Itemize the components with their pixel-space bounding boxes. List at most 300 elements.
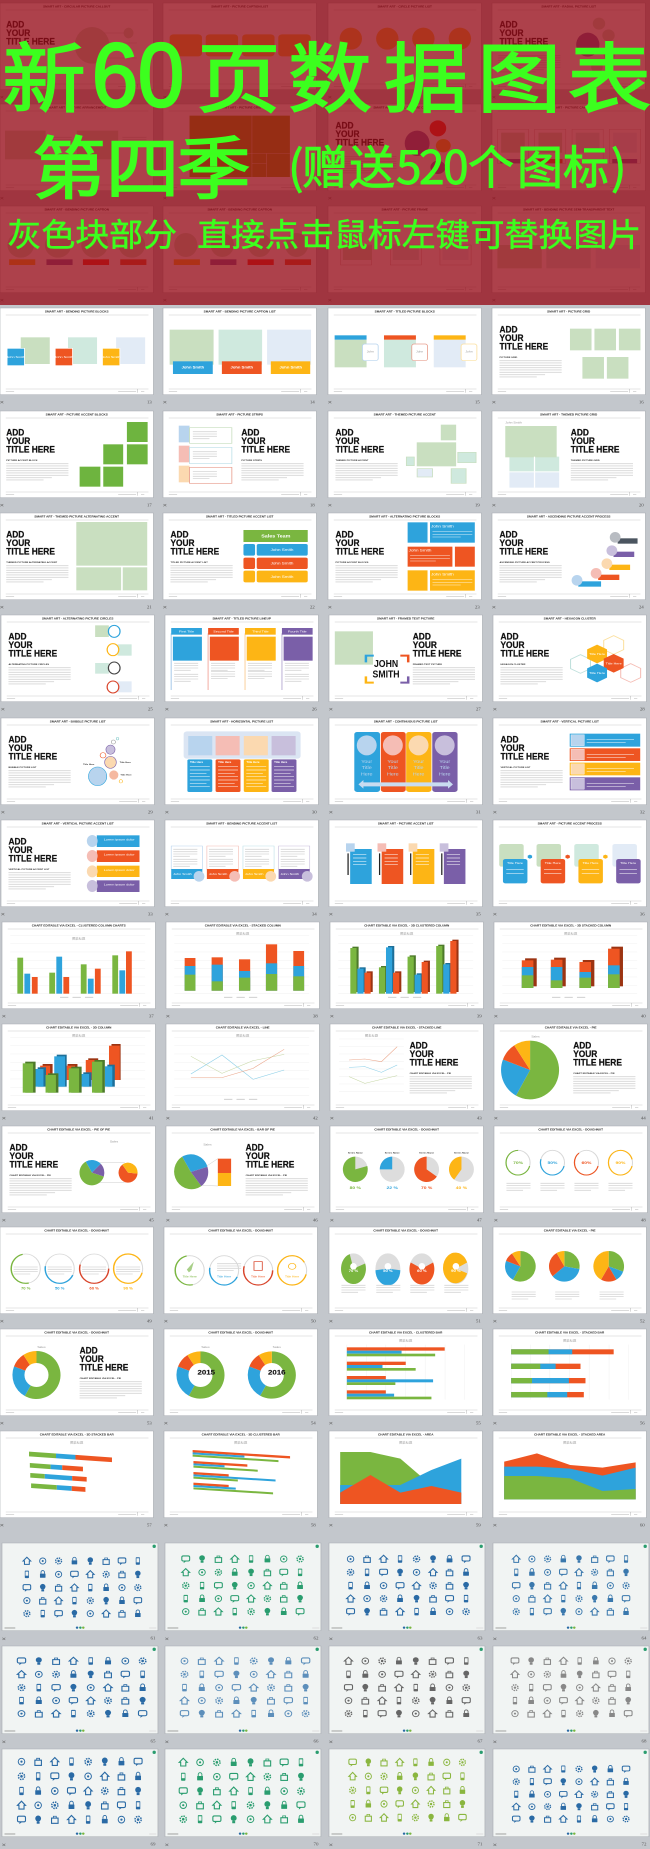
slide 29: Title Here bbox=[120, 761, 132, 764]
slide 17: SMART ART - PICTURE ACCENT BLOCKS bbox=[46, 413, 108, 417]
slide 53: doughnut chart: 53 bbox=[147, 1421, 153, 1425]
slide 32: VERTICAL PICTURE LIST bbox=[500, 766, 531, 769]
slide 50: doughnut icon rings: Title Here bbox=[251, 1275, 266, 1278]
slide 59: area chart: 59 bbox=[476, 1523, 482, 1527]
slide 68: icon grid: 68 bbox=[641, 1739, 647, 1744]
instruction line: 灰色块部分直接点击鼠标左键可替换图片 bbox=[7, 210, 641, 256]
slide 42: line chart: CHART EDITABLE VIA EXCEL - LINE bbox=[216, 1026, 270, 1030]
slide 1: circular picture callout: SMART ART - CIRCULAR PICTURE CALLOUT bbox=[43, 5, 111, 9]
slide 66: icon grid: 66 bbox=[313, 1739, 319, 1744]
slide 42: line chart: 图表标题 bbox=[236, 1033, 249, 1038]
slide 17: YOUR bbox=[6, 436, 31, 446]
slide 1: circular picture callout: YOUR bbox=[6, 28, 31, 38]
slide 23: John Smith bbox=[431, 572, 455, 576]
slide 26: Third Title bbox=[252, 630, 269, 634]
slide 47: doughnut percent pies: Series Name bbox=[385, 1152, 400, 1154]
slide 13 bbox=[0, 308, 153, 404]
slide 43: stacked line chart: CHART EDITABLE VIA EXCEL - PIE bbox=[410, 1072, 452, 1075]
slide 30 bbox=[165, 718, 318, 814]
slide 47: doughnut percent pies: 70 % bbox=[421, 1185, 432, 1190]
slide 23: John Smith bbox=[409, 548, 432, 553]
slide 28: Title Here bbox=[589, 652, 605, 656]
slide 55: clustered bar chart: CHART EDITABLE VIA EXCEL - CLUSTERED BAR bbox=[369, 1331, 442, 1335]
slide 51: doughnut pies with labels: 70 % bbox=[349, 1269, 359, 1273]
slide 17 bbox=[0, 411, 153, 507]
slide 43: stacked line chart: YOUR bbox=[410, 1049, 434, 1059]
slide 24: SMART ART - ASCENDING PICTURE ACCENT PROCESS bbox=[527, 515, 611, 519]
slide 34: John Smith bbox=[209, 872, 228, 876]
slide 37: clustered column chart bbox=[2, 922, 155, 1018]
slide 13: 13 bbox=[147, 400, 153, 404]
slide 54: two doughnuts 2015 2016 bbox=[164, 1329, 317, 1425]
slide 34 bbox=[165, 820, 318, 916]
slide 33: Lorem ipsum dolor bbox=[104, 838, 136, 842]
slide 48: doughnut rings: 70% bbox=[513, 1160, 523, 1165]
slide 43: stacked line chart: ADD bbox=[410, 1040, 428, 1050]
slide 58: 3D clustered bar chart: 图表标题 bbox=[234, 1440, 247, 1445]
slide 7: radial picture callout: SMART ART - RADIAL PICTURE CALLOUT bbox=[373, 106, 436, 110]
slide 23: TITLE HERE bbox=[335, 546, 384, 557]
slide 51: doughnut pies with labels: 90 % bbox=[451, 1269, 461, 1273]
slide 50: doughnut icon rings: 50 bbox=[311, 1319, 317, 1323]
slide 47: doughnut percent pies: 40 % bbox=[456, 1185, 467, 1190]
slide 49: doughnut text rings: CHART EDITABLE VIA EXCEL - DOUGHNUT bbox=[44, 1229, 109, 1233]
slide 38: stacked column chart bbox=[166, 922, 319, 1018]
slide 34: SMART ART - BENDING PICTURE ACCENT LIST bbox=[206, 822, 277, 826]
slide 28: TITLE HERE bbox=[500, 648, 549, 659]
slide 46: bar of pie: ADD bbox=[246, 1142, 264, 1152]
slide 50: doughnut icon rings: Title Here bbox=[217, 1275, 232, 1278]
slide 47: doughnut percent pies: Series Name bbox=[419, 1152, 435, 1154]
slide 53: doughnut chart: CHART EDITABLE VIA EXCEL - PIE bbox=[80, 1377, 122, 1380]
slide 31: Your bbox=[387, 759, 399, 765]
slide 28: YOUR bbox=[500, 640, 525, 650]
slide 47: doughnut percent pies bbox=[330, 1126, 483, 1222]
slide 44: pie chart: 44 bbox=[641, 1116, 647, 1120]
slide 32: YOUR bbox=[500, 743, 525, 753]
slide 21: SMART ART - THEMED PICTURE ALTERNATING ACCENT bbox=[34, 515, 119, 519]
slide 23: ADD bbox=[335, 529, 354, 539]
slide 44: pie chart: TITLE HERE bbox=[573, 1057, 622, 1068]
slide 1: circular picture callout: ADD bbox=[6, 19, 25, 29]
slide 61: icon grid: 61 bbox=[150, 1636, 155, 1641]
slide 33: 33 bbox=[148, 912, 154, 916]
slide 69: icon grid bbox=[2, 1749, 158, 1847]
slide 59: area chart: CHART EDITABLE VIA EXCEL - AREA bbox=[378, 1433, 433, 1437]
slide 39: 3D clustered column chart: CHART EDITABLE VIA EXCEL - 3D CLUSTERED COLUMN bbox=[364, 924, 449, 928]
slide 13: SMART ART - BENDING PICTURE BLOCKS bbox=[45, 310, 109, 314]
slide 33: Lorem ipsum dolor bbox=[104, 883, 136, 887]
slide 58: 3D clustered bar chart: 58 bbox=[311, 1523, 317, 1527]
slide 57: 3D stacked bar chart: CHART EDITABLE VIA EXCEL - 3D STACKED BAR bbox=[40, 1433, 114, 1437]
slide 47: doughnut percent pies: Series Name bbox=[454, 1152, 470, 1154]
slide 33: VERTICAL PICTURE ACCENT LIST bbox=[8, 868, 50, 871]
slide 17: PICTURE ACCENT BLOCK bbox=[6, 459, 38, 462]
slide 11: picture frames: SMART ART - PICTURE FRAME bbox=[382, 208, 428, 212]
slide 54: two doughnuts 2015 2016: Sales bbox=[273, 1345, 281, 1349]
slide 44: pie chart: CHART EDITABLE VIA EXCEL - PIE bbox=[545, 1026, 597, 1030]
title block bbox=[499, 324, 548, 352]
slide 24: ASCENDING PICTURE ACCENT PROCESS bbox=[499, 561, 550, 564]
slide 15: 15 bbox=[475, 400, 481, 404]
slide 20 bbox=[492, 411, 645, 507]
slide 38: stacked column chart: 38 bbox=[313, 1014, 319, 1018]
slide 13: John Smith bbox=[55, 355, 73, 359]
slide 7: radial picture callout: TITLE HERE bbox=[335, 137, 384, 148]
slide 49: doughnut text rings: 70 % bbox=[21, 1287, 31, 1290]
slide 31: 31 bbox=[476, 810, 481, 814]
slide 4: radial picture list bbox=[492, 3, 645, 98]
slide 51: doughnut pies with labels: 60 % bbox=[417, 1269, 427, 1273]
slide 67: icon grid bbox=[329, 1646, 485, 1744]
slide 28: Title Here bbox=[589, 671, 605, 675]
slide 32: ADD bbox=[500, 734, 519, 744]
slide 63: icon grid bbox=[329, 1543, 485, 1641]
slide 26: Fourth Title bbox=[288, 630, 307, 634]
slide 45: pie of pie: TITLE HERE bbox=[9, 1159, 58, 1170]
slide 22: ADD bbox=[170, 529, 189, 539]
slide 48: doughnut rings: 60% bbox=[582, 1160, 591, 1165]
slide 54: two doughnuts 2015 2016: 54 bbox=[311, 1421, 317, 1425]
slide 25: ALTERNATING PICTURE CIRCLES bbox=[8, 663, 50, 666]
slide 27: FRAMED TEXT PICTURE bbox=[413, 663, 443, 666]
slide 22: SMART ART - TITLED PICTURE ACCENT LIST bbox=[206, 515, 274, 519]
slide 56: stacked bar chart: 图表标题 bbox=[563, 1338, 576, 1343]
slide 23: PICTURE ACCENT BLOCKS bbox=[335, 561, 369, 564]
slide 29: 29 bbox=[148, 810, 154, 814]
slide 55: clustered bar chart: 55 bbox=[476, 1421, 482, 1425]
slide 27: YOUR bbox=[413, 640, 437, 650]
slide 49: doughnut text rings bbox=[0, 1227, 153, 1323]
slide 53: doughnut chart: CHART EDITABLE VIA EXCEL - DOUGHNUT bbox=[44, 1331, 109, 1335]
slide 36: Title Here bbox=[507, 861, 523, 865]
slide 4: radial picture list: SMART ART - RADIAL PICTURE LIST bbox=[541, 5, 596, 9]
slide 53: doughnut chart bbox=[0, 1329, 153, 1425]
slide 57: 3D stacked bar chart: 图表标题 bbox=[70, 1440, 83, 1445]
slide 46: bar of pie: CHART EDITABLE VIA EXCEL - PIE bbox=[246, 1174, 288, 1177]
slide 45: pie of pie bbox=[2, 1126, 155, 1222]
slide 63: icon grid: 63 bbox=[477, 1636, 483, 1641]
slide 44: pie chart bbox=[494, 1024, 647, 1120]
slide 26: SMART ART - TITLED PICTURE LINEUP bbox=[212, 617, 271, 621]
slide 22: John Smith bbox=[271, 574, 294, 579]
slide 19 bbox=[328, 411, 481, 507]
slide 4: radial picture list: TITLE HERE bbox=[499, 36, 548, 47]
slide 44: pie chart: ADD bbox=[573, 1040, 592, 1050]
slide 55: clustered bar chart: 图表标题 bbox=[399, 1338, 412, 1343]
slide 15: SMART ART - TITLED PICTURE BLOCKS bbox=[375, 310, 435, 314]
slide 43: stacked line chart: 图表标题 bbox=[365, 1033, 378, 1038]
slide 31: Here bbox=[387, 772, 399, 777]
slide 47: doughnut percent pies: 80 % bbox=[350, 1185, 361, 1190]
slide 54: two doughnuts 2015 2016: CHART EDITABLE VIA EXCEL - DOUGHNUT bbox=[208, 1331, 273, 1335]
slide 29: YOUR bbox=[8, 743, 33, 753]
slide 36: SMART ART - PICTURE ACCENT PROCESS bbox=[538, 822, 602, 826]
slide 10: bending picture caption: SMART ART - BENDING PICTURE CAPTION bbox=[207, 208, 272, 212]
slide 38: stacked column chart: CHART EDITABLE VIA EXCEL - STACKED COLUMN bbox=[205, 924, 281, 928]
slide 45: pie of pie: 45 bbox=[149, 1218, 155, 1222]
slide 22: John Smith bbox=[271, 561, 294, 566]
slide 31: Your bbox=[413, 759, 424, 765]
slide 59: area chart: 图表标题 bbox=[399, 1440, 412, 1445]
slide 45: pie of pie: CHART EDITABLE VIA EXCEL - PIE bbox=[9, 1174, 51, 1177]
slide 24: ADD bbox=[499, 529, 518, 539]
slide 19: 19 bbox=[475, 503, 481, 507]
slide 22: TITLED PICTURE ACCENT LIST bbox=[170, 561, 208, 564]
slide 8: picture captions bbox=[492, 104, 645, 199]
slide 43: stacked line chart: CHART EDITABLE VIA EXCEL - STACKED LINE bbox=[372, 1026, 442, 1030]
slide 23 bbox=[328, 513, 481, 609]
slide 71: icon grid bbox=[329, 1749, 485, 1847]
slide 21: THEMED PICTURE ALTERNATING ACCENT bbox=[6, 561, 58, 564]
slide 69: icon grid: 69 bbox=[150, 1842, 156, 1847]
slide 1: circular picture callout bbox=[0, 3, 153, 98]
slide 49: doughnut text rings: 49 bbox=[147, 1319, 153, 1323]
slide 32: TITLE HERE bbox=[500, 751, 549, 762]
slide 40: 3D stacked column chart: 40 bbox=[641, 1014, 647, 1018]
slide 52: three pies: 52 bbox=[640, 1319, 645, 1323]
slide 12: bending picture with transparent text bbox=[492, 206, 645, 301]
slide 18: ADD bbox=[241, 427, 260, 437]
slide 11: picture frames bbox=[328, 206, 481, 301]
slide 17: ADD bbox=[6, 427, 25, 437]
slide 24 bbox=[492, 513, 645, 609]
slide 56: stacked bar chart bbox=[493, 1329, 646, 1425]
slide 50: doughnut icon rings: CHART EDITABLE VIA EXCEL - DOUGHNUT bbox=[208, 1229, 273, 1233]
slide 52: three pies bbox=[493, 1227, 646, 1323]
slide 43: stacked line chart: TITLE HERE bbox=[410, 1057, 458, 1068]
slide 27: ADD bbox=[413, 631, 431, 641]
slide 28: ADD bbox=[500, 631, 519, 641]
banner: headline bbox=[2, 18, 650, 256]
slide 46: bar of pie: CHART EDITABLE VIA EXCEL - BAR OF PIE bbox=[210, 1128, 275, 1132]
slide 60: stacked area chart: 图表标题 bbox=[563, 1440, 576, 1445]
slide 16: PICTURE GRID bbox=[499, 357, 518, 359]
slide 71: icon grid: 71 bbox=[477, 1842, 482, 1847]
slide 54: two doughnuts 2015 2016: 2016 bbox=[268, 1369, 286, 1376]
slide 25: SMART ART - ALTERNATING PICTURE CIRCLES bbox=[42, 617, 114, 621]
slide 9: bending picture caption bbox=[0, 206, 153, 301]
slide 19: TITLE HERE bbox=[335, 444, 384, 455]
slide 48: doughnut rings: CHART EDITABLE VIA EXCEL - DOUGHNUT bbox=[538, 1128, 603, 1132]
slide 26: 26 bbox=[312, 707, 318, 711]
slide 22: 22 bbox=[310, 605, 315, 609]
slide 22: Sales Team bbox=[261, 534, 291, 539]
slide 53: doughnut chart: Sales bbox=[37, 1345, 46, 1349]
slide 45: pie of pie: Sales bbox=[110, 1140, 119, 1143]
slide 29: SMART ART - BUBBLE PICTURE LIST bbox=[50, 720, 106, 724]
slide 47: doughnut percent pies: Series Name bbox=[348, 1152, 364, 1154]
slide 4: radial picture list: YOUR bbox=[499, 28, 524, 38]
slide 56: stacked bar chart: CHART EDITABLE VIA EXCEL - STACKED BAR bbox=[535, 1331, 604, 1335]
slide 48: doughnut rings: 50% bbox=[548, 1160, 557, 1165]
slide 36 bbox=[493, 820, 646, 916]
title block: TITLE HERE bbox=[499, 341, 548, 352]
slide 41: 3D column chart: 图表标题 bbox=[72, 1033, 85, 1038]
slide 70: icon grid: 70 bbox=[313, 1842, 319, 1847]
slide 20: YOUR bbox=[571, 436, 595, 446]
slide 61: icon grid bbox=[2, 1543, 158, 1641]
slide 28 bbox=[493, 615, 646, 711]
slide 14: John Smith bbox=[231, 366, 254, 370]
slide 51: doughnut pies with labels: 51 bbox=[476, 1319, 481, 1323]
slide 25: 25 bbox=[148, 707, 154, 711]
slide 19: THEMED PICTURE ACCENT bbox=[335, 459, 369, 462]
slide 29: Title Here bbox=[120, 774, 133, 777]
slide 33: Lorem ipsum dolor bbox=[104, 853, 136, 857]
slide 21 bbox=[0, 513, 153, 609]
slide 58: 3D clustered bar chart bbox=[164, 1431, 317, 1527]
slide 31: Title bbox=[362, 765, 372, 771]
slide 30: Title Here bbox=[274, 760, 288, 764]
slide 33: YOUR bbox=[8, 845, 33, 855]
slide 23: YOUR bbox=[335, 538, 360, 548]
slide 9: bending picture caption: SMART ART - BENDING PICTURE CAPTION bbox=[44, 208, 109, 212]
slide 30: Title Here bbox=[190, 760, 204, 764]
slide 32: SMART ART - VERTICAL PICTURE LIST bbox=[541, 720, 599, 724]
slide 20: THEMED PICTURE GRID bbox=[571, 460, 600, 462]
slide 67: icon grid: 67 bbox=[477, 1739, 483, 1744]
slide 7: radial picture callout: ADD bbox=[335, 120, 354, 130]
slide 16: 16 bbox=[639, 400, 645, 404]
slide 50: doughnut icon rings: Title Here bbox=[183, 1275, 197, 1278]
slide 28: Title Here bbox=[606, 662, 622, 665]
slide 60: stacked area chart: CHART EDITABLE VIA EXCEL - STACKED AREA bbox=[534, 1433, 605, 1437]
slide 37: clustered column chart: 37 bbox=[149, 1014, 155, 1018]
slide 18: SMART ART - PICTURE STRIPS bbox=[216, 413, 263, 417]
slide 22: YOUR bbox=[170, 538, 195, 548]
slide 48: doughnut rings: 48 bbox=[641, 1218, 647, 1222]
slide 59: area chart bbox=[329, 1431, 482, 1527]
slide 65: icon grid: 65 bbox=[150, 1739, 156, 1744]
slide 58: 3D clustered bar chart: CHART EDITABLE VIA EXCEL - 3D CLUSTERED BAR bbox=[202, 1433, 280, 1437]
headline line 1: 新 bbox=[2, 18, 86, 129]
slide 47: doughnut percent pies: 22 % bbox=[387, 1185, 398, 1190]
slide 33: Lorem ipsum dolor bbox=[104, 868, 136, 872]
slide 37: clustered column chart: 图表标题 bbox=[72, 936, 85, 941]
slide 45: pie of pie: CHART EDITABLE VIA EXCEL - PIE OF PIE bbox=[47, 1128, 110, 1132]
slide 7: radial picture callout bbox=[328, 104, 481, 199]
slide 53: doughnut chart: YOUR bbox=[80, 1354, 104, 1364]
slide 3: circle pictures: SMART ART - CIRCLE PICTURE LIST bbox=[377, 5, 432, 9]
slide 24: TITLE HERE bbox=[499, 546, 548, 557]
slide 45: pie of pie: YOUR bbox=[9, 1151, 34, 1161]
slide 26: First Title bbox=[179, 630, 194, 634]
slide 54: two doughnuts 2015 2016: 2015 bbox=[198, 1369, 215, 1376]
slide 57: 3D stacked bar chart: 57 bbox=[147, 1523, 153, 1527]
slide 29: ADD bbox=[8, 734, 27, 744]
slide 44: pie chart: CHART EDITABLE VIA EXCEL - PIE bbox=[573, 1072, 615, 1075]
slide 22: John Smith bbox=[271, 547, 294, 552]
slide 34: John Smith bbox=[173, 872, 192, 876]
slide 64: icon grid bbox=[493, 1543, 649, 1641]
slide 41: 3D column chart bbox=[2, 1024, 155, 1120]
slide 20: ADD bbox=[571, 427, 589, 437]
slide 29: Title Here bbox=[83, 763, 95, 766]
slide 31: Your bbox=[361, 759, 373, 765]
slide 25 bbox=[1, 615, 154, 711]
slide 46: bar of pie bbox=[166, 1126, 319, 1222]
slide 8: picture captions: SMART ART - PICTURE CAPTION bbox=[544, 106, 593, 110]
slide 36: 36 bbox=[640, 912, 646, 916]
slide 37: clustered column chart: CHART EDITABLE VIA EXCEL - CLUSTERED COLUMN CHARTS bbox=[32, 924, 126, 928]
slide 18 bbox=[163, 411, 316, 507]
slide 34: 34 bbox=[312, 912, 318, 916]
slide 13: John Smith bbox=[6, 355, 25, 359]
slide 40: 3D stacked column chart bbox=[494, 922, 647, 1018]
slide 53: doughnut chart: TITLE HERE bbox=[80, 1362, 128, 1373]
slide 4: radial picture list: ADD bbox=[499, 19, 518, 29]
slide 14: 14 bbox=[310, 400, 316, 404]
slide 13: John Smith bbox=[102, 355, 121, 359]
slide 31: Title bbox=[440, 765, 450, 771]
slide 16 bbox=[492, 308, 645, 404]
title block: YOUR bbox=[499, 333, 524, 343]
slide 45: pie of pie: ADD bbox=[9, 1142, 28, 1152]
slide 15: John bbox=[416, 350, 424, 354]
slide 20: SMART ART - THEMED PICTURE GRID bbox=[540, 413, 597, 417]
slide 49: doughnut text rings: 60 % bbox=[89, 1287, 100, 1290]
slide 35: SMART ART - PICTURE ACCENT LIST bbox=[378, 822, 434, 826]
slide 50: doughnut icon rings bbox=[164, 1227, 317, 1323]
slide 33: ADD bbox=[8, 836, 27, 846]
slide 68: icon grid bbox=[493, 1646, 649, 1744]
slide 17: TITLE HERE bbox=[6, 444, 55, 455]
slide 24: 24 bbox=[639, 605, 645, 609]
slide 19: SMART ART - THEMED PICTURE ACCENT bbox=[374, 413, 436, 417]
slide 38: stacked column chart: 图表标题 bbox=[236, 931, 249, 936]
slide 29: TITLE HERE bbox=[8, 751, 57, 762]
slide 6: picture grid bbox=[163, 104, 316, 199]
slide 36: Title Here bbox=[620, 861, 636, 865]
slide 31: Title bbox=[388, 765, 398, 771]
slide 46: bar of pie: YOUR bbox=[246, 1151, 270, 1161]
slide 25: ADD bbox=[8, 631, 27, 641]
slide 53: doughnut chart: ADD bbox=[80, 1345, 98, 1355]
slide 10: bending picture caption bbox=[163, 206, 316, 301]
slide 6: picture grid: SMART ART - PICTURE GRID bbox=[218, 106, 261, 110]
slide 21: 21 bbox=[147, 605, 152, 609]
slide 28: HEXAGON CLUSTER bbox=[500, 663, 526, 666]
slide 20: John Smith bbox=[505, 421, 522, 425]
slide 46: bar of pie: Sales bbox=[203, 1143, 212, 1147]
slide 5: picture arrangement bbox=[0, 104, 153, 199]
slide 30: Title Here bbox=[218, 760, 232, 764]
slide 26 bbox=[165, 615, 318, 711]
slide 18: PICTURE STRIPS bbox=[241, 460, 262, 462]
slide 28: 28 bbox=[640, 707, 646, 711]
slide 39: 3D clustered column chart: 图表标题 bbox=[400, 931, 413, 936]
slide 65: icon grid bbox=[2, 1646, 158, 1744]
slide 14: John Smith bbox=[279, 366, 303, 370]
slide 14: John Smith bbox=[182, 366, 205, 370]
slide 51: doughnut pies with labels bbox=[329, 1227, 482, 1323]
slide 57: 3D stacked bar chart bbox=[0, 1431, 153, 1527]
slide 72: icon grid bbox=[493, 1749, 649, 1847]
slide 49: doughnut text rings: 90 % bbox=[123, 1287, 134, 1290]
slide 5: picture arrangement: SMART ART - PICTURE ARRANGEMENT bbox=[47, 106, 107, 110]
slide 23: 23 bbox=[475, 605, 481, 609]
slide 35 bbox=[329, 820, 482, 916]
slide 31: Here bbox=[361, 772, 373, 777]
slide 3: circle pictures bbox=[328, 3, 481, 98]
slide 42: line chart bbox=[166, 1024, 319, 1120]
slide 30: 30 bbox=[312, 810, 318, 814]
slide 20: 20 bbox=[639, 503, 645, 507]
slide 2: picture caption list: SMART ART - PICTURE CAPTION LIST bbox=[211, 5, 268, 9]
slide 14 bbox=[163, 308, 316, 404]
slide 26: Second Title bbox=[213, 630, 234, 634]
